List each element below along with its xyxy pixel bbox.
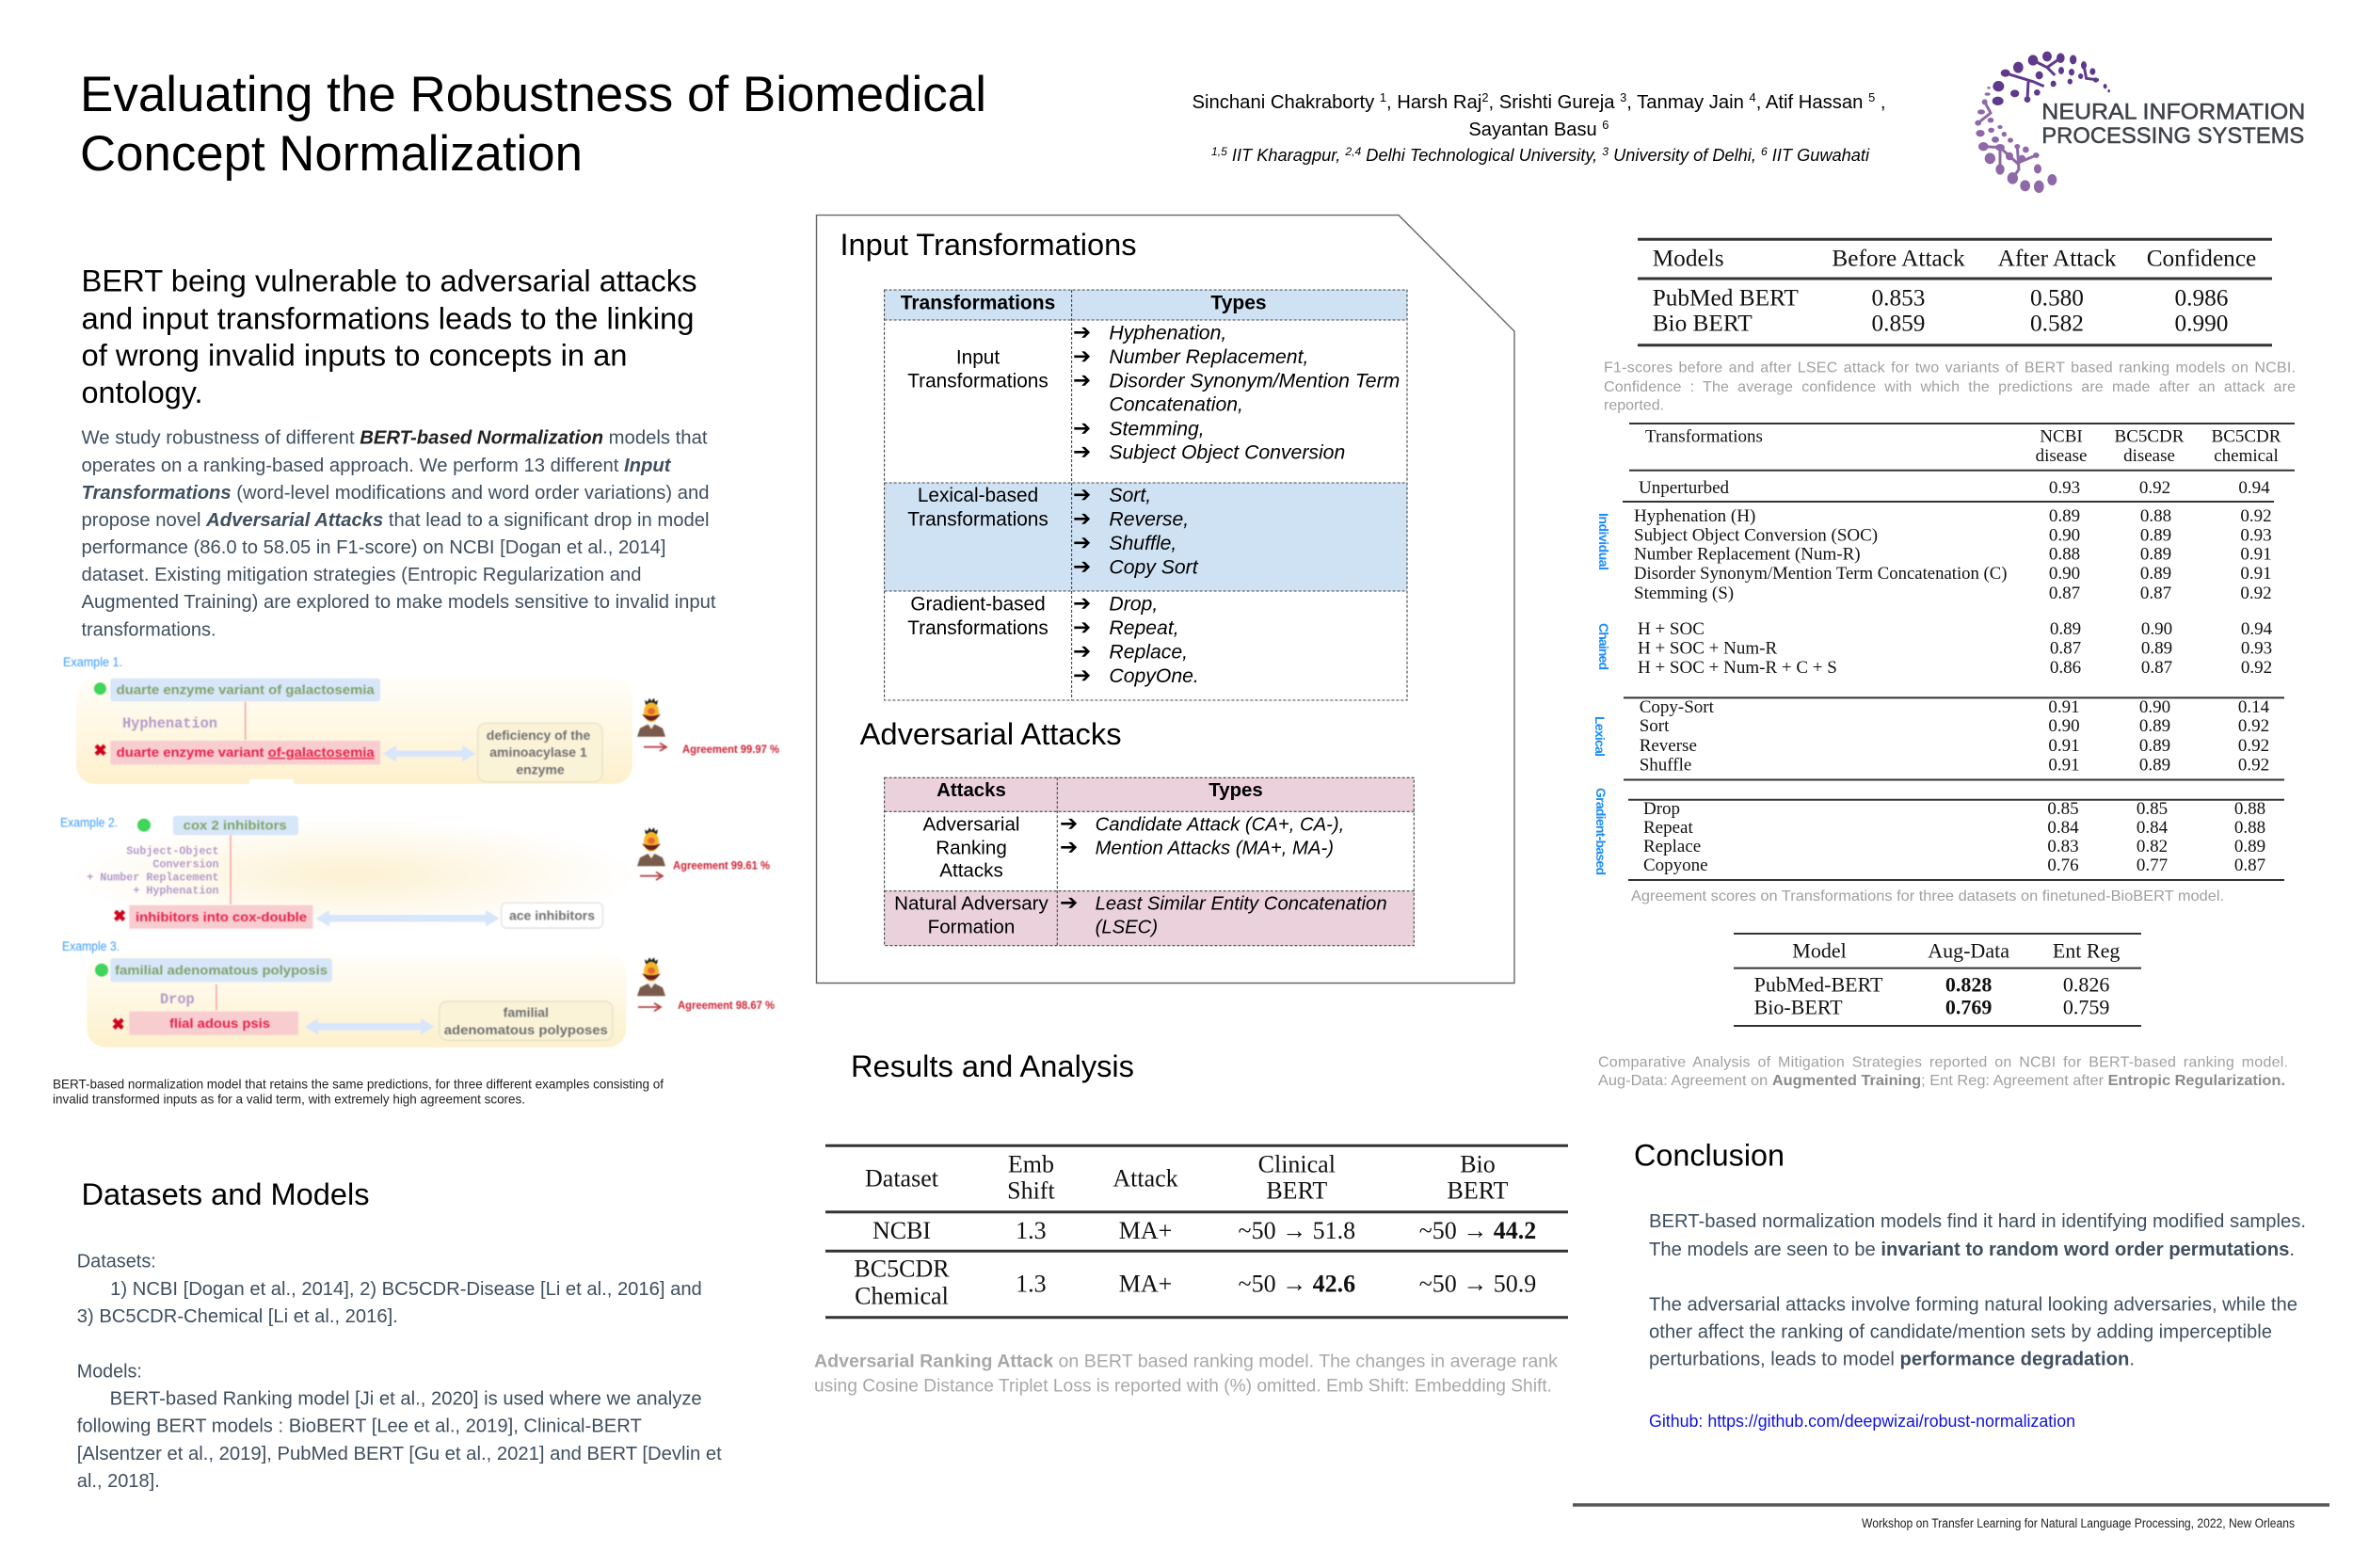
- table: agreement scores on transformations: 0.89: [2140, 545, 2171, 565]
- side label: Gradient-based: Gradient-based: [1593, 788, 1609, 875]
- text block: conclusion: other affect the ranking of candidate/mention sets by adding imperceptible: [1649, 1321, 2272, 1342]
- table: adversarial ranking attack results: [825, 1145, 1568, 1318]
- table: agreement scores on transformations: H + SOC + Num-R: [1638, 638, 1777, 658]
- example 3: flial adous psis: [169, 1016, 270, 1031]
- table: transformations: ➔: [1073, 616, 1091, 640]
- example 1: Hyphenation: [122, 715, 217, 732]
- caption: mitigation strategies: Comparative Analysis of Mitigation Strategies reported on NCBI for BERT-based ranking model.: [1598, 1054, 2288, 1070]
- caption: F1 scores: F1-scores before and after LSEC attack for two variants of BERT based ranking models on NCBI.: [1604, 360, 2296, 376]
- table: transformations: Disorder Synonym/Mention Term: [1109, 371, 1400, 392]
- table: attacks: Least Similar Entity Concatenation: [1096, 894, 1387, 915]
- table: adversarial ranking attack results: Emb: [1008, 1151, 1054, 1178]
- table: agreement scores on transformations: 0.89: [2139, 755, 2170, 775]
- caption: adversarial ranking attack: [814, 1352, 1559, 1396]
- example 1: [63, 655, 779, 785]
- example 2: Example 2.: [60, 815, 118, 829]
- table: mitigation strategies: Aug-Data: [1928, 939, 2009, 962]
- authors and affiliations: 1: [1380, 90, 1386, 104]
- table: mitigation strategies: PubMed-BERT: [1754, 972, 1883, 996]
- text block: datasets and models: 3) BC5CDR-Chemical [Li et al., 2016].: [77, 1306, 398, 1327]
- table: adversarial ranking attack results: Clinical: [1258, 1151, 1336, 1178]
- table: F1 scores before and after attack: Models: [1653, 246, 1724, 272]
- example 3: Agreement 98.67 %: [678, 1000, 775, 1012]
- table: adversarial ranking attack results: Bio: [1460, 1151, 1496, 1178]
- table: agreement scores on transformations: 0.92: [2139, 478, 2170, 498]
- table: F1 scores before and after attack: 0.859: [1872, 311, 1925, 337]
- table: transformations: ➔: [1073, 416, 1091, 440]
- table: transformations: ➔: [1073, 344, 1091, 369]
- caption: examples: invalid transformed inputs as for a valid term, with extremely high agreement scores.: [53, 1092, 525, 1107]
- table: agreement scores on transformations: BC5CDR: [2212, 427, 2281, 447]
- table: agreement scores on transformations: Drop: [1643, 799, 1680, 819]
- example 2: ✖: [113, 907, 126, 925]
- table: attacks: Candidate Attack (CA+, CA-),: [1096, 815, 1344, 836]
- table: agreement scores on transformations: 0.89: [2049, 506, 2080, 526]
- text block: conclusion: The adversarial attacks involve forming natural looking adversaries, while the: [1649, 1295, 2297, 1316]
- table: adversarial ranking attack results: BERT: [1266, 1176, 1327, 1204]
- table: transformations: Replace,: [1109, 642, 1188, 663]
- text block: datasets and models: following BERT models : BioBERT [Lee et al., 2019], Clinical-BERT: [77, 1416, 642, 1437]
- caption: agreement scores: Agreement scores on Transformations for three datasets on finetuned-BioBERT model.: [1631, 888, 2224, 904]
- authors and affiliations: , Atif Hassan: [1756, 91, 1868, 113]
- table: attacks: Attacks: [936, 780, 1006, 801]
- table: agreement scores on transformations: Stemming (S): [1634, 584, 1734, 603]
- table: agreement scores on transformations: Hyphenation (H): [1634, 506, 1755, 526]
- table: agreement scores on transformations: 0.93: [2049, 478, 2080, 498]
- table: agreement scores on transformations: 0.89: [2141, 638, 2172, 658]
- example 3: Drop: [160, 991, 195, 1008]
- heading: conclusion: Conclusion: [1634, 1139, 1785, 1173]
- table: attacks: Types: [1209, 780, 1263, 801]
- authors and affiliations: Sinchani Chakraborty: [1192, 91, 1376, 113]
- table: transformations: Stemming,: [1109, 418, 1205, 440]
- table: F1 scores before and after attack: PubMed BERT: [1653, 284, 1799, 311]
- text block: datasets and models: [Alsentzer et al., 2019], PubMed BERT [Gu et al., 2021] and BERT [Devlin et: [77, 1444, 722, 1464]
- table: agreement scores on transformations: 0.91: [2048, 755, 2080, 775]
- table: adversarial ranking attack results: ~50 → 51.8: [1239, 1217, 1355, 1244]
- table: agreement scores on transformations: 0.92: [2240, 584, 2272, 603]
- text block: introduction: Transformations (word-level modifications and word order variations) and: [81, 483, 709, 504]
- example 3: adenomatous polyposes: [444, 1022, 608, 1037]
- table: agreement scores on transformations: disease: [2036, 446, 2087, 466]
- table: agreement scores on transformations: 0.92: [2240, 506, 2272, 526]
- example 1: Example 1.: [63, 655, 122, 669]
- example 1: deficiency of the: [487, 728, 590, 743]
- table: transformations: Drop,: [1109, 593, 1158, 616]
- heading: results and analysis: Results and Analysis: [851, 1049, 1134, 1083]
- example 1: ✖: [94, 742, 107, 760]
- logo wordmark: PROCESSING SYSTEMS: [2041, 123, 2304, 149]
- authors and affiliations: , Srishti Gureja: [1488, 91, 1620, 113]
- text block: datasets and models: [77, 1252, 722, 1492]
- table: mitigation strategies: Model: [1792, 939, 1847, 962]
- authors and affiliations: 2,4: [1344, 145, 1362, 158]
- authors and affiliations: IIT Kharagpur,: [1227, 146, 1345, 165]
- logo wordmark: NEURAL INFORMATION: [2041, 100, 2305, 125]
- authors and affiliations: IIT Guwahati: [1768, 146, 1870, 165]
- text block: introduction: propose novel Adversarial Attacks that lead to a significant drop in model: [81, 510, 710, 531]
- table: agreement scores on transformations: disease: [2123, 446, 2175, 466]
- table: transformations: ➔: [1073, 640, 1091, 664]
- table: attacks: ➔: [1060, 835, 1078, 859]
- table: mitigation strategies: Ent Reg: [2053, 939, 2120, 962]
- table: transformations: Types: [1210, 293, 1267, 314]
- table: mitigation strategies: 0.828: [1945, 972, 1992, 996]
- logo: Neural Information Processing Systems: [1976, 52, 2305, 193]
- table: agreement scores on transformations: 0.87: [2234, 856, 2265, 875]
- table: agreement scores on transformations: 0.92: [2241, 658, 2272, 678]
- heading: datasets and models: Datasets and Models: [81, 1177, 370, 1211]
- table: attacks: Natural Adversary: [894, 893, 1049, 915]
- table: agreement scores on transformations: 0.84: [2047, 818, 2079, 838]
- example 3: familial: [504, 1005, 549, 1020]
- table: agreement scores on transformations: NCBI: [2040, 427, 2083, 447]
- table: F1 scores before and after attack: Before Attack: [1832, 246, 1965, 272]
- table: agreement scores on transformations: Number Replacement (Num-R): [1634, 545, 1861, 565]
- table: mitigation strategies: Bio-BERT: [1754, 995, 1843, 1018]
- side label: Chained: Chained: [1596, 623, 1611, 670]
- table: mitigation strategies: [1734, 934, 2141, 1026]
- example 1: Agreement 99.97 %: [682, 744, 779, 756]
- authors and affiliations: , Harsh Raj: [1386, 91, 1481, 113]
- footer rule: [1573, 1503, 2329, 1507]
- table: F1 scores before and after attack: 0.582: [2030, 311, 2084, 337]
- heading: input transformations: Input Transformations: [840, 228, 1137, 262]
- heading: main claim: of wrong invalid inputs to concepts in an: [81, 339, 627, 373]
- table: agreement scores on transformations: 0.88: [2140, 506, 2171, 526]
- authors and affiliations: 3: [1620, 90, 1626, 104]
- caption: adversarial ranking attack: Adversarial Ranking Attack on BERT based ranking model. The changes in average rank: [814, 1352, 1559, 1371]
- table: agreement scores on transformations: 0.89: [2139, 736, 2170, 756]
- table: agreement scores on transformations: Repeat: [1643, 818, 1693, 838]
- table: agreement scores on transformations: 0.91: [2048, 736, 2080, 756]
- table: agreement scores on transformations: BC5CDR: [2115, 427, 2185, 447]
- table: F1 scores before and after attack: 0.986: [2175, 284, 2228, 311]
- authors and affiliations: Sayantan Basu: [1468, 119, 1599, 140]
- example 2: [60, 815, 770, 932]
- heading: adversarial attacks: Adversarial Attacks: [860, 717, 1122, 751]
- table: transformations: Transformations: [901, 293, 1055, 314]
- table: agreement scores on transformations: 0.90: [2049, 525, 2080, 546]
- table: agreement scores on transformations: chemical: [2214, 446, 2279, 466]
- table: agreement scores on transformations: 0.93: [2240, 525, 2272, 546]
- example 3: ✖: [111, 1016, 125, 1033]
- table: attacks: ➔: [1060, 812, 1078, 837]
- table: agreement scores on transformations: Reverse: [1640, 736, 1697, 756]
- title: Evaluating the Robustness of Biomedical: [80, 67, 986, 122]
- table: agreement scores on transformations: 0.91: [2240, 545, 2272, 565]
- heading: main claim: ontology.: [81, 376, 203, 409]
- authors and affiliations: 6: [1761, 145, 1768, 158]
- table: transformations: ➔: [1073, 531, 1091, 555]
- text block: introduction: performance (86.0 to 58.05 in F1-score) on NCBI [Dogan et al., 2014]: [81, 537, 666, 558]
- text block: introduction: We study robustness of different BERT-based Normalization models that: [81, 427, 708, 448]
- table: agreement scores on transformations: 0.85: [2047, 799, 2079, 819]
- caption: F1 scores: reported.: [1604, 398, 1664, 414]
- authors and affiliations: 3: [1602, 145, 1609, 158]
- authors and affiliations: 5: [1868, 90, 1875, 104]
- table: agreement scores on transformations: 0.94: [2241, 619, 2273, 639]
- table: adversarial ranking attack results: BERT: [1448, 1176, 1509, 1204]
- table: agreement scores on transformations: Transformations: [1645, 427, 1763, 447]
- table: transformations: ➔: [1073, 483, 1091, 507]
- table: transformations: ➔: [1073, 507, 1091, 532]
- text block: datasets and models: BERT-based Ranking model [Ji et al., 2020] is used where we analyze: [110, 1389, 702, 1410]
- table: mitigation strategies: 0.769: [1945, 995, 1992, 1018]
- table: agreement scores on transformations: 0.83: [2047, 837, 2079, 856]
- text block: introduction: transformations.: [81, 619, 216, 640]
- text block: datasets and models: 1) NCBI [Dogan et al., 2014], 2) BC5CDR-Disease [Li et al., 2016] and: [110, 1279, 702, 1300]
- table: agreement scores on transformations: 0.89: [2140, 564, 2171, 584]
- table: F1 scores before and after attack: 0.580: [2030, 284, 2084, 311]
- table: F1 scores before and after attack: Bio BERT: [1653, 311, 1753, 337]
- table: agreement scores on transformations: 0.88: [2234, 818, 2265, 838]
- table: transformations: ➔: [1073, 664, 1091, 688]
- panel: adversarial examples: [60, 655, 779, 1048]
- authors and affiliations: Delhi Technological University,: [1361, 146, 1602, 165]
- table: mitigation strategies: 0.826: [2063, 972, 2109, 996]
- example 3: Example 3.: [62, 939, 120, 953]
- authors and affiliations: 2: [1481, 90, 1488, 104]
- table: transformations: Repeat,: [1109, 617, 1179, 639]
- caption: examples: [53, 1077, 664, 1107]
- table: attacks: Adversarial: [922, 814, 1020, 836]
- table: agreement scores on transformations: 0.87: [2141, 658, 2172, 678]
- table: agreement scores on transformations: 0.92: [2238, 755, 2269, 775]
- table: adversarial ranking attack results: Chemical: [855, 1283, 949, 1310]
- table: agreement scores on transformations: 0.86: [2050, 658, 2081, 678]
- icon: Bert puppet: [637, 698, 665, 737]
- table: agreement scores on transformations: 0.89: [2050, 619, 2081, 639]
- table: agreement scores on transformations: 0.91: [2240, 564, 2272, 584]
- logo wordmark: [2041, 100, 2305, 149]
- example 2: cox 2 inhibitors: [184, 818, 287, 833]
- table: adversarial ranking attack results: ~50 → 42.6: [1239, 1271, 1355, 1298]
- table: agreement scores on transformations: 0.90: [2048, 716, 2080, 736]
- table: transformations: Hyphenation,: [1109, 323, 1226, 344]
- table: F1 scores before and after attack: After Attack: [1998, 246, 2117, 272]
- title: Concept Normalization: [80, 126, 583, 182]
- table: attacks: [885, 777, 1414, 946]
- example 2: Conversion: [152, 857, 218, 871]
- table: agreement scores on transformations: 0.90: [2139, 697, 2170, 717]
- authors and affiliations: 4: [1750, 90, 1756, 104]
- table: adversarial ranking attack results: BC5CDR: [854, 1256, 950, 1283]
- table: adversarial ranking attack results: ~50 → 44.2: [1419, 1217, 1536, 1244]
- text block: introduction: Augmented Training) are explored to make models sensitive to invalid input: [81, 592, 716, 613]
- table: attacks: Ranking: [936, 837, 1007, 858]
- table: transformations: ➔: [1073, 555, 1091, 580]
- table: agreement scores on transformations: 0.92: [2238, 736, 2269, 756]
- table: adversarial ranking attack results: 1.3: [1016, 1271, 1047, 1298]
- table: agreement scores on transformations: 0.85: [2137, 799, 2168, 819]
- table: agreement scores on transformations: H + SOC: [1638, 619, 1705, 639]
- table: transformations: Copy Sort: [1109, 557, 1199, 579]
- table: transformations: Transformations: [907, 509, 1048, 531]
- table: agreement scores on transformations: Shuffle: [1640, 755, 1691, 775]
- table: agreement scores on transformations: 0.76: [2047, 856, 2079, 875]
- authors and affiliations: 1,5: [1211, 145, 1227, 158]
- example 2: inhibitors into cox-double: [136, 909, 307, 924]
- text block: conclusion: BERT-based normalization models find it hard in identifying modified samples.: [1649, 1211, 2306, 1232]
- table: transformations: Number Replacement,: [1109, 346, 1308, 368]
- table: agreement scores on transformations: Disorder Synonym/Mention Term Concatenation (C): [1634, 564, 2007, 584]
- table: agreement scores on transformations: Replace: [1643, 837, 1701, 856]
- example 3: familial adenomatous polyposis: [115, 962, 328, 977]
- heading: main claim: BERT being vulnerable to adversarial attacks: [81, 264, 697, 297]
- table: attacks: ➔: [1060, 891, 1078, 916]
- example 1: enzyme: [516, 761, 565, 776]
- table: transformations: ➔: [1073, 440, 1091, 465]
- table: agreement scores on transformations: Subject Object Conversion (SOC): [1634, 525, 1878, 546]
- authors and affiliations: [1192, 90, 1885, 165]
- table: transformations: Transformations: [907, 617, 1048, 639]
- table: adversarial ranking attack results: 1.3: [1016, 1217, 1047, 1244]
- heading: main claim: [81, 264, 697, 409]
- example 2: Agreement 99.61 %: [673, 860, 770, 872]
- icon: Bert puppet: [637, 827, 665, 866]
- text block: datasets and models: al., 2018].: [77, 1471, 160, 1492]
- heading: main claim: and input transformations leads to the linking: [81, 301, 695, 335]
- caption: examples: BERT-based normalization model that retains the same predictions, for three different examples consisting of: [53, 1077, 664, 1092]
- table: F1 scores before and after attack: [1638, 239, 2272, 345]
- table: adversarial ranking attack results: ~50 → 50.9: [1419, 1271, 1536, 1298]
- text block: datasets and models: Models:: [77, 1361, 142, 1382]
- example 1: aminoacylase 1: [489, 744, 587, 760]
- text block: introduction: operates on a ranking-based approach. We perform 13 different Input: [81, 456, 672, 476]
- table: agreement scores on transformations: 0.88: [2049, 545, 2080, 565]
- table: agreement scores on transformations: 0.89: [2234, 837, 2265, 856]
- table: agreement scores on transformations: 0.87: [2050, 638, 2081, 658]
- table: F1 scores before and after attack: Confidence: [2147, 246, 2256, 272]
- table: agreement scores on transformations: 0.89: [2139, 716, 2170, 736]
- table: agreement scores on transformations: 0.87: [2140, 584, 2171, 603]
- table: agreement scores on transformations: Copyone: [1643, 856, 1708, 875]
- table: attacks: Formation: [928, 916, 1015, 937]
- table: transformations: Concatenation,: [1109, 394, 1243, 416]
- table: transformations: Reverse,: [1109, 509, 1189, 531]
- table: adversarial ranking attack results: Dataset: [865, 1165, 939, 1192]
- caption: mitigation strategies: [1598, 1054, 2288, 1089]
- table: transformations: CopyOne.: [1109, 665, 1199, 687]
- table: agreement scores on transformations: Copy-Sort: [1640, 697, 1715, 717]
- caption: F1 scores: Confidence : The average confidence with which the predictions are made after an attack are: [1604, 379, 2296, 395]
- text block: conclusion: perturbations, leads to model performance degradation.: [1649, 1350, 2135, 1370]
- table: agreement scores on transformations: 0.93: [2241, 638, 2272, 658]
- table: transformations: Subject Object Conversion: [1109, 442, 1345, 464]
- table: agreement scores on transformations: 0.94: [2238, 478, 2270, 498]
- example 1: duarte enzyme variant of-galactosemia: [117, 744, 375, 760]
- text block: conclusion: The models are seen to be invariant to random word order permutations .: [1649, 1240, 2295, 1260]
- table: agreement scores on transformations: H + SOC + Num-R + C + S: [1638, 658, 1837, 678]
- authors and affiliations: 6: [1602, 118, 1609, 132]
- table: attacks: Mention Attacks (MA+, MA-): [1096, 838, 1334, 858]
- table: transformations: Gradient-based: [910, 593, 1046, 616]
- table: agreement scores on transformations: Unperturbed: [1639, 478, 1730, 498]
- table: agreement scores on transformations: 0.82: [2137, 837, 2168, 856]
- table: transformations: Transformations: [907, 371, 1048, 392]
- table: transformations: ➔: [1073, 369, 1091, 393]
- example 2: + Number Replacement: [87, 872, 218, 885]
- table: attacks: (LSEC): [1096, 917, 1158, 937]
- text block: introduction: [81, 427, 716, 640]
- table: transformations: ➔: [1073, 591, 1091, 616]
- icon: dotted crescent: [1976, 52, 2110, 193]
- table: agreement scores on transformations: 0.77: [2137, 856, 2168, 875]
- table: F1 scores before and after attack: 0.853: [1872, 284, 1925, 311]
- table: mitigation strategies: 0.759: [2063, 995, 2109, 1018]
- table: transformations: Sort,: [1109, 485, 1151, 506]
- example 2: ace inhibitors: [509, 907, 595, 922]
- example 2: + Hyphenation: [133, 884, 218, 897]
- table: agreement scores on transformations: 0.90: [2049, 564, 2080, 584]
- authors and affiliations: University of Delhi,: [1609, 146, 1761, 165]
- table: transformations: [885, 290, 1407, 700]
- text block: datasets and models: Datasets:: [77, 1252, 156, 1272]
- text block: conclusion: [1649, 1211, 2306, 1370]
- example 2: Subject-Object: [126, 844, 218, 857]
- table: transformations: Input: [956, 347, 1000, 369]
- title: [80, 67, 986, 182]
- table: agreement scores on transformations: Sort: [1640, 716, 1670, 736]
- table: adversarial ranking attack results: MA+: [1119, 1271, 1172, 1298]
- table: F1 scores before and after attack: 0.990: [2175, 311, 2228, 337]
- table: agreement scores on transformations: [1593, 424, 2295, 880]
- caption: adversarial ranking attack: using Cosine Distance Triplet Loss is reported with (%) omitted. Emb Shift: Embedding Shift.: [814, 1376, 1552, 1396]
- table: adversarial ranking attack results: NCBI: [872, 1217, 931, 1244]
- table: attacks: Attacks: [939, 860, 1003, 882]
- table: adversarial ranking attack results: Attack: [1112, 1165, 1178, 1192]
- table: agreement scores on transformations: 0.88: [2234, 799, 2265, 819]
- table: transformations: Lexical-based: [918, 485, 1038, 506]
- side label: Lexical: Lexical: [1593, 716, 1608, 757]
- table: transformations: ➔: [1073, 321, 1091, 345]
- table: agreement scores on transformations: 0.90: [2141, 619, 2172, 639]
- link: github: Github: https://github.com/deepwizai/robust-normalization: [1649, 1412, 2075, 1431]
- side label: Individual: Individual: [1596, 513, 1611, 570]
- example 1: duarte enzyme variant of galactosemia: [117, 681, 375, 696]
- icon: Bert puppet: [637, 957, 665, 996]
- table: agreement scores on transformations: 0.84: [2137, 818, 2169, 838]
- table: agreement scores on transformations: 0.87: [2049, 584, 2080, 603]
- authors and affiliations: , Tanmay Jain: [1626, 91, 1750, 113]
- text block: introduction: dataset. Existing mitigation strategies (Entropic Regularization and: [81, 565, 642, 585]
- table: agreement scores on transformations: 0.14: [2238, 697, 2270, 717]
- caption: mitigation strategies: Aug-Data: Agreement on Augmented Training; Ent Reg: Agreement after Entropic Regularization.: [1598, 1073, 2285, 1089]
- table: agreement scores on transformations: 0.92: [2238, 716, 2269, 736]
- footer: workshop: Workshop on Transfer Learning for Natural Language Processing, 2022, New Orleans: [1862, 1516, 2295, 1530]
- authors and affiliations: ,: [1875, 91, 1885, 113]
- table: adversarial ranking attack results: Shift: [1007, 1176, 1055, 1204]
- table: adversarial ranking attack results: MA+: [1119, 1217, 1172, 1244]
- table: agreement scores on transformations: 0.91: [2048, 697, 2080, 717]
- example 3: [62, 939, 775, 1048]
- caption: F1 scores: [1604, 360, 2296, 414]
- table: transformations: Shuffle,: [1109, 533, 1176, 554]
- table: agreement scores on transformations: 0.89: [2140, 525, 2171, 546]
- panel: input transformations and adversarial attacks: [817, 216, 1514, 984]
